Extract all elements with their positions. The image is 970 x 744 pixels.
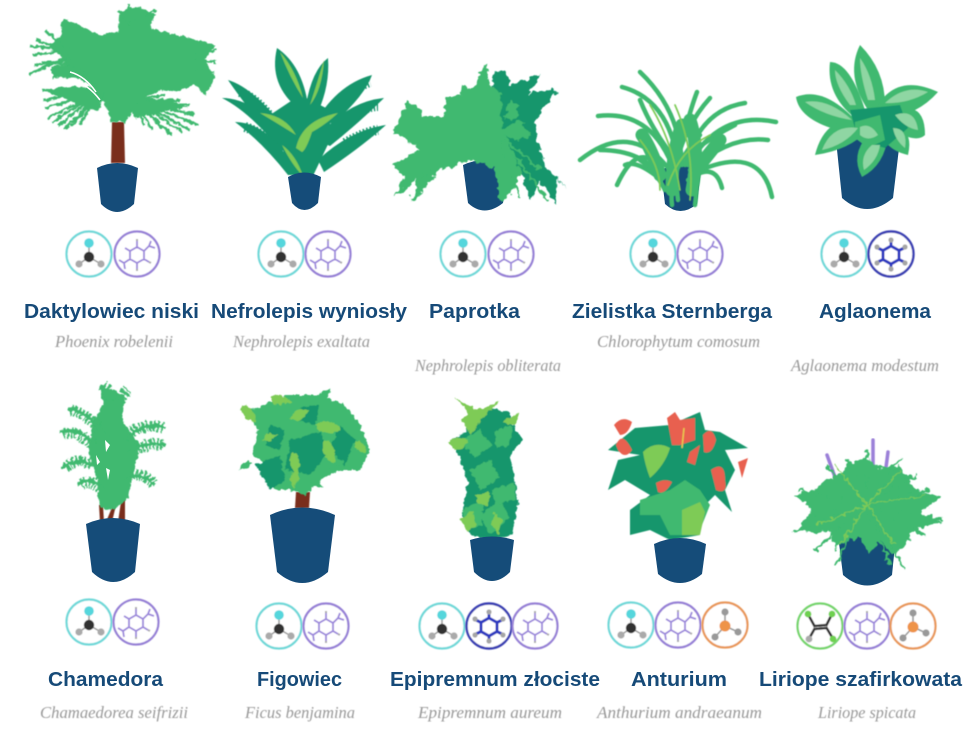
name: Figowiec: [257, 669, 342, 691]
illustration: spider plant: [580, 72, 776, 205]
pot: [86, 518, 140, 582]
name: Nefrolepis wyniosły: [211, 301, 408, 323]
illustration: boston fern: [222, 48, 386, 178]
name: Liriope szafirkowata: [759, 669, 963, 691]
icon: formaldehyde: [630, 232, 676, 276]
illustration: pothos: [448, 398, 523, 540]
name: Chamedora: [48, 669, 164, 691]
name: Paprotka: [429, 301, 521, 323]
plant card: Zielistka Sternberga: [572, 72, 776, 351]
icon: xylene: [890, 604, 936, 648]
icon: formaldehyde: [440, 232, 486, 276]
pot: [288, 172, 321, 210]
plant card: Anturium: [596, 412, 762, 722]
plant card: Daktylowiec niski: [24, 5, 217, 351]
pot: [470, 536, 514, 581]
icon: formaldehyde: [256, 604, 302, 648]
latin name: Chlorophytum comosum: [597, 332, 760, 351]
icon: trichloroethylene: [512, 604, 558, 648]
illustration: anthurium: [608, 412, 748, 540]
pot: [270, 508, 335, 583]
icon: trichloroethylene: [306, 232, 350, 276]
latin name: Nephrolepis obliterata: [414, 356, 561, 375]
plant card: Chamedora: [40, 385, 188, 722]
plant card: Liriope szafirkowata: [759, 440, 963, 722]
icon: trichloroethylene: [488, 232, 534, 276]
icon: benzene: [466, 604, 512, 648]
illustration: ficus: [237, 387, 370, 508]
latin name: Chamaedorea seifrizii: [40, 703, 188, 722]
plant card: Epipremnum złociste: [390, 398, 600, 722]
icon: trichloroethylene: [304, 604, 348, 648]
icon: trichloroethylene: [114, 600, 158, 644]
pot: [661, 165, 701, 211]
icon: benzene: [868, 232, 914, 276]
icon: formaldehyde: [66, 232, 112, 276]
illustration: palm: [30, 5, 217, 163]
pot: [838, 530, 896, 586]
icon: formaldehyde: [608, 602, 654, 648]
illustration: liriope: [793, 440, 942, 568]
plant card: Nefrolepis wyniosły: [211, 48, 408, 351]
plant card: Paprotka: [392, 64, 566, 375]
latin name: Aglaonema modestum: [790, 356, 939, 375]
pot: [654, 538, 706, 583]
icon: formaldehyde: [822, 232, 866, 276]
icon: xylene: [702, 602, 748, 648]
icon: formaldehyde: [66, 600, 112, 644]
name: Zielistka Sternberga: [572, 301, 773, 323]
pot: [463, 160, 508, 210]
name: Epipremnum złociste: [390, 669, 600, 691]
illustration: aglaonema: [796, 45, 938, 177]
plant card: Aglaonema: [790, 45, 939, 375]
latin name: Ficus benjamina: [244, 703, 355, 722]
illustration: bamboo palm: [60, 385, 166, 522]
icon: trichloroethylene: [844, 604, 890, 648]
illustration: fern: [392, 64, 566, 204]
latin name: Anthurium andraeanum: [596, 703, 762, 722]
name: Daktylowiec niski: [24, 301, 199, 323]
pot: [836, 134, 900, 209]
icon: trichloroethylene: [678, 232, 722, 276]
icon: ethylene: [798, 604, 842, 648]
icon: trichloroethylene: [114, 232, 160, 276]
icon: trichloroethylene: [656, 602, 700, 648]
pot: [97, 163, 138, 212]
icon: formaldehyde: [258, 232, 304, 276]
latin name: Liriope spicata: [817, 703, 916, 722]
latin name: Nephrolepis exaltata: [232, 332, 370, 351]
latin name: Epipremnum aureum: [417, 703, 562, 722]
latin name: Phoenix robelenii: [54, 332, 173, 351]
plant card: Figowiec: [237, 387, 370, 722]
icon: formaldehyde: [420, 604, 464, 648]
name: Anturium: [631, 669, 727, 691]
name: Aglaonema: [819, 301, 932, 323]
